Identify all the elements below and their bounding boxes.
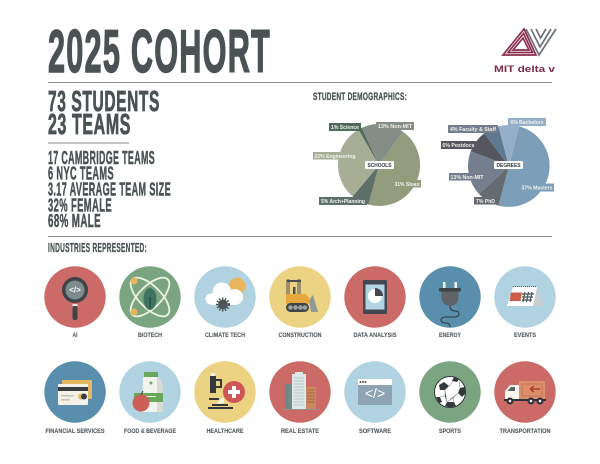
logo: MIT delta v	[494, 29, 556, 75]
pie chart: degrees: 6% Postdocs	[442, 143, 475, 149]
label: healthcare: HEALTHCARE	[206, 429, 244, 435]
logo: MIT delta v: MIT delta v	[494, 64, 556, 75]
icon: transportation	[494, 361, 556, 423]
icon: software: </>	[365, 385, 385, 401]
text: 3.17 AVERAGE TEAM SIZE	[48, 178, 171, 200]
label: AI: AI	[72, 333, 78, 339]
pie chart: degrees: 37% Masters	[522, 186, 553, 192]
label: events: EVENTS	[514, 333, 536, 339]
label: energy: ENERGY	[439, 333, 461, 339]
icon: real estate	[269, 361, 331, 423]
headline stats	[48, 86, 160, 141]
pie chart: schools: 1% Science	[331, 125, 359, 131]
pie chart: degrees: 4% Faculty & Staff	[450, 127, 496, 133]
heading: student demographics: STUDENT DEMOGRAPHICS:	[313, 91, 407, 103]
icon: events	[494, 266, 556, 328]
pie chart: schools: 22% Engineering	[314, 154, 356, 160]
label: food and beverage: FOOD & BEVERAGE	[124, 429, 176, 435]
icon: food and beverage	[119, 361, 181, 423]
icon: construction	[269, 266, 331, 328]
pie chart: schools: 31% Sloan	[394, 182, 420, 188]
pie chart: degrees: 6% Bachelors	[510, 120, 544, 126]
pie chart: schools: SCHOOLS	[368, 163, 392, 169]
label: real estate: REAL ESTATE	[281, 429, 319, 435]
headline stats: 23 TEAMS	[48, 109, 131, 141]
heading: industries represented: INDUSTRIES REPRESENTED:	[48, 241, 147, 255]
label: biotech: BIOTECH	[138, 333, 162, 339]
label: data analysis: DATA ANALYSIS	[354, 333, 396, 339]
detail stats: 6 NYC TEAMS	[48, 162, 114, 184]
title: 2025 COHORT	[48, 18, 271, 85]
icon: AI: </>	[69, 286, 81, 294]
pie chart: schools: 5% Arch+Planning	[321, 199, 365, 205]
icon: biotech	[119, 266, 181, 328]
detail stats: 32% FEMALE	[48, 194, 112, 216]
icon: healthcare	[194, 361, 256, 423]
detail stats: 68% MALE	[48, 210, 101, 231]
label: climate tech: CLIMATE TECH	[205, 333, 245, 339]
icon: software	[344, 361, 406, 423]
label: sports: SPORTS	[439, 429, 461, 435]
detail stats: 17 CAMBRIDGE TEAMS	[48, 147, 155, 168]
icon: sports	[419, 361, 481, 423]
label: transportation: TRANSPORTATION	[500, 429, 550, 435]
icon: data analysis	[344, 266, 406, 328]
icon: energy	[419, 266, 481, 328]
icon: AI	[44, 266, 106, 328]
pie chart: degrees	[441, 118, 554, 207]
pie chart: degrees: 7% PhD	[476, 199, 495, 205]
icon: climate tech	[194, 266, 256, 328]
pie chart: degrees: DEGREES	[496, 163, 521, 169]
pie chart: schools: 13% Non-MIT	[378, 124, 412, 130]
pie chart: degrees: 13% Non-MIT	[450, 175, 484, 181]
detail stats	[48, 147, 171, 231]
label: software: SOFTWARE	[359, 429, 391, 435]
icon: financial services	[44, 361, 106, 423]
pie chart: schools	[313, 122, 421, 206]
label: financial services: FINANCIAL SERVICES	[46, 429, 104, 435]
headline stats: 73 STUDENTS	[48, 86, 160, 118]
label: construction: CONSTRUCTION	[278, 333, 322, 339]
